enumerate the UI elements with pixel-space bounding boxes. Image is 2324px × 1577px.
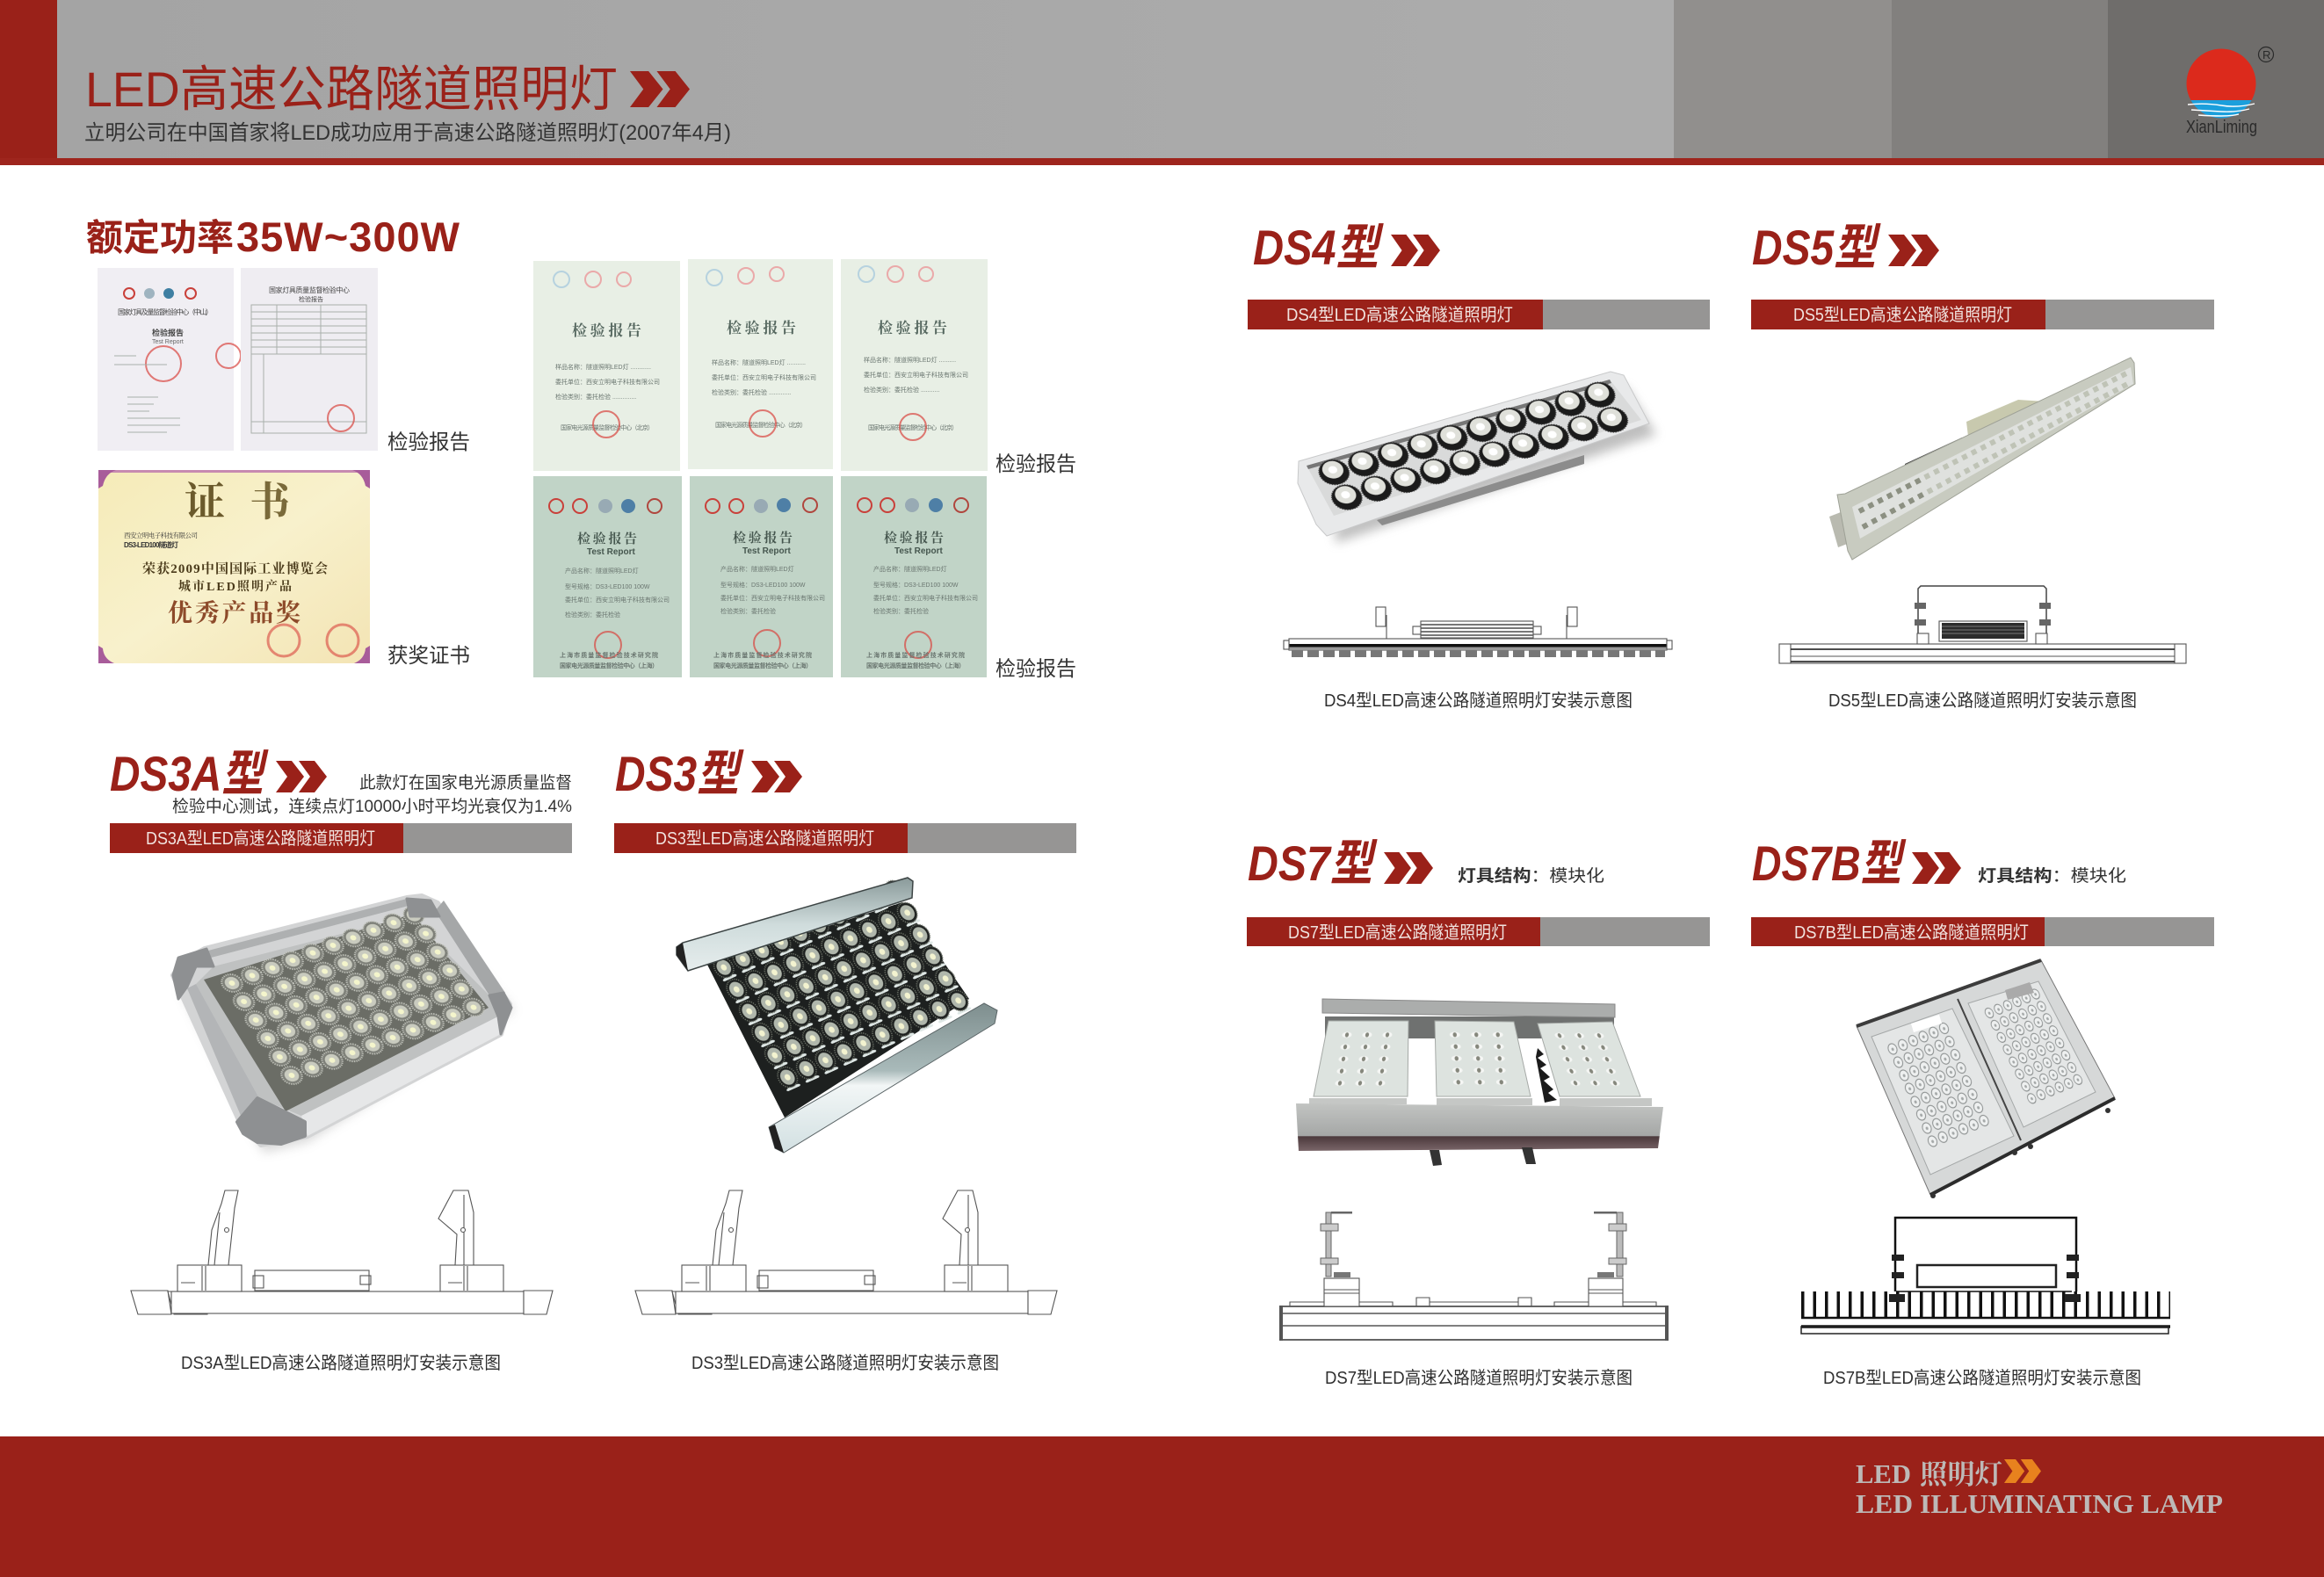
DS3 caption: DS3型LED高速公路隧道照明灯安装示意图 <box>691 1353 999 1373</box>
certificate: 城市LED照明产品 <box>178 580 292 594</box>
icon: DS3 chevrons <box>751 761 802 792</box>
green report A3 <box>841 259 988 471</box>
report document 1: Test Report <box>152 339 184 345</box>
DS7 label bar <box>1247 917 1710 946</box>
label: inspection report: 检验报告 <box>995 657 1076 680</box>
green report B1: Test Report <box>587 547 635 557</box>
DS5 label bar: DS5型LED高速公路隧道照明灯 <box>1793 305 2012 325</box>
green report A2: 国家电光源质量监督检验中心（北京） <box>715 421 807 429</box>
DS7B heading: DS7B型 <box>1752 836 1907 891</box>
report document 2 <box>241 268 378 451</box>
DS7 mounting drawing <box>1279 1212 1669 1341</box>
panel: DS3 <box>614 746 1076 1373</box>
panel: DS4 <box>1248 220 1710 711</box>
certificate: DS3-LED100隧道灯 <box>124 540 178 549</box>
footer text: LED ILLUMINATING LAMP <box>1856 1488 2223 1519</box>
footer text: 照明灯 <box>1920 1459 2002 1490</box>
subtitle: 立明公司在中国首家将LED成功应用于高速公路隧道照明灯(2007年4月) <box>84 121 731 145</box>
DS3A note: 检验中心测试，连续点灯10000小时平均光衰仅为1.4% <box>172 797 572 816</box>
panel: DS5 <box>1751 220 2214 711</box>
green report B2: 国家电光源质量监督检验中心（上海） <box>713 662 812 669</box>
DS3 mounting drawing <box>635 1190 1057 1314</box>
certificate: 荣获2009中国国际工业博览会 <box>142 561 328 576</box>
heading: rated power: 35W~300W <box>236 213 460 260</box>
green report B2 <box>690 476 833 677</box>
report document 1 <box>98 268 241 451</box>
panel: DS7B <box>1751 836 2214 1388</box>
DS4 lamp photo <box>1298 372 1656 543</box>
DS5 lamp photo <box>1829 358 2135 560</box>
DS4 caption: DS4型LED高速公路隧道照明灯安装示意图 <box>1324 691 1633 711</box>
DS7B lamp photo <box>1857 960 2115 1198</box>
logo: XianLiming <box>2186 47 2274 137</box>
green report B1: 型号规格：DS3-LED100 100W <box>565 582 650 590</box>
icon: DS3A chevrons <box>276 761 327 792</box>
label: award certificate: 获奖证书 <box>387 644 470 667</box>
green report A1: 样品名称：隧道照明LED灯 ............ <box>555 363 651 371</box>
certificate: 证 <box>185 480 225 524</box>
DS3A label bar <box>110 823 572 853</box>
green report B1: 产品名称：隧道照明LED灯 <box>565 567 639 575</box>
DS7 lamp photo <box>1296 999 1663 1166</box>
header band <box>0 0 2324 165</box>
DS7 caption: DS7型LED高速公路隧道照明灯安装示意图 <box>1325 1368 1633 1388</box>
DS7B label bar <box>1751 917 2214 946</box>
DS7B mounting drawing <box>1801 1218 2170 1334</box>
DS3 label bar <box>614 823 1076 853</box>
green report B1: 国家电光源质量监督检验中心（上海） <box>560 662 658 669</box>
green report B3 <box>841 476 987 677</box>
green report A2: 委托单位：西安立明电子科技有限公司 <box>712 373 816 381</box>
green report B1: 检 验 报 告 <box>577 531 637 546</box>
green report A1: 检 验 报 告 <box>572 322 641 339</box>
icon: footer chevrons <box>2004 1459 2041 1483</box>
icon: DS4 chevrons <box>1391 235 1440 266</box>
green report B2: 上海市质量监督检验技术研究院 <box>713 651 812 659</box>
certificate: 西安立明电子科技有限公司 <box>124 531 198 539</box>
green report A3: 委托单位：西安立明电子科技有限公司 <box>864 371 968 379</box>
DS7B caption: DS7B型LED高速公路隧道照明灯安装示意图 <box>1823 1368 2141 1388</box>
DS7 label bar: DS7型LED高速公路隧道照明灯 <box>1288 922 1507 943</box>
heading: rated power <box>86 213 460 260</box>
green report B2: 产品名称：隧道照明LED灯 <box>720 565 794 573</box>
DS7B label bar: DS7B型LED高速公路隧道照明灯 <box>1794 922 2029 943</box>
DS7 structure note: 灯具结构 ：模块化 <box>1458 866 1604 886</box>
green report B3: 型号规格：DS3-LED100 100W <box>873 581 959 589</box>
green report B3: 检验类别：委托检验 <box>873 607 929 615</box>
icon: DS7 chevrons <box>1384 852 1433 884</box>
green report B2: 检验类别：委托检验 <box>720 607 776 615</box>
logo: XianLiming: R <box>2262 48 2270 61</box>
green report B3: 检 验 报 告 <box>884 530 944 546</box>
title: LED高速公路隧道照明灯 <box>85 61 618 117</box>
report document 2: 检验报告 <box>299 295 323 303</box>
DS3A heading: DS3A型 <box>110 746 269 801</box>
DS3A caption: DS3A型LED高速公路隧道照明灯安装示意图 <box>181 1353 501 1373</box>
green report B2: 检 验 报 告 <box>733 530 793 546</box>
DS3A lamp photo <box>173 896 514 1153</box>
panel: DS7 <box>1247 836 1710 1388</box>
report document 2: 国家灯具质量监督检验中心 <box>269 286 350 294</box>
label: inspection report: 检验报告 <box>995 452 1076 475</box>
panel: DS3A <box>110 746 572 1373</box>
green report B2: Test Report <box>742 546 791 556</box>
footer text: LED <box>1856 1458 1911 1489</box>
DS5 label bar <box>1751 300 2214 329</box>
logo: XianLiming: XianLiming <box>2186 118 2257 137</box>
DS4 mounting drawing <box>1284 607 1672 654</box>
green report B3: 产品名称：隧道照明LED灯 <box>873 565 947 573</box>
DS5 caption: DS5型LED高速公路隧道照明灯安装示意图 <box>1828 691 2137 711</box>
DS3 lamp photo <box>677 876 997 1153</box>
DS4 label bar: DS4型LED高速公路隧道照明灯 <box>1286 305 1513 325</box>
certificate <box>98 470 370 663</box>
green report A2: 检 验 报 告 <box>727 319 796 336</box>
DS4 label bar <box>1248 300 1710 329</box>
green report A1: 国家电光源质量监督检验中心（北京） <box>561 423 654 431</box>
green report A1: 委托单位：西安立明电子科技有限公司 <box>555 378 660 386</box>
certificate: 书 <box>250 480 291 524</box>
green report A3: 样品名称：隧道照明LED灯 .......... <box>864 356 956 364</box>
label: inspection report: 检验报告 <box>387 430 470 453</box>
DS7 heading: DS7型 <box>1248 836 1378 891</box>
green report B2: 型号规格：DS3-LED100 100W <box>720 581 806 589</box>
DS3A note: 此款灯在国家电光源质量监督 <box>359 773 572 792</box>
green report A1: 检验类别：委托检验 .............. <box>555 393 636 401</box>
green report B1: 委托单位：西安立明电子科技有限公司 <box>565 596 670 604</box>
DS7B structure note: 灯具结构 ：模块化 <box>1978 866 2126 886</box>
green report B3: Test Report <box>894 546 943 556</box>
green report A3: 检验类别：委托检验 ........... <box>864 386 939 394</box>
green report A3: 国家电光源质量监督检验中心（北京） <box>868 423 958 431</box>
green report A2: 样品名称：隧道照明LED灯 ........... <box>712 358 806 366</box>
footer band <box>0 1436 2324 1577</box>
DS4 heading: DS4型 <box>1253 220 1384 275</box>
green report A2: 检验类别：委托检验 ............. <box>712 388 791 396</box>
DS3A label bar: DS3A型LED高速公路隧道照明灯 <box>146 828 375 849</box>
green report B2: 委托单位：西安立明电子科技有限公司 <box>720 594 825 602</box>
green report A1 <box>533 261 680 471</box>
green report B1 <box>533 476 682 677</box>
report document 1: 检验报告 <box>152 328 184 337</box>
certificate: 优秀产品奖 <box>168 599 300 627</box>
green report A3: 检 验 报 告 <box>878 319 947 336</box>
green report B1: 检验类别：委托检验 <box>565 611 620 619</box>
heading: rated power: 额定功率 <box>86 217 234 258</box>
icon: DS7B chevrons <box>1912 852 1961 884</box>
green report B3: 国家电光源质量监督检验中心（上海） <box>866 662 965 669</box>
DS3A mounting drawing <box>131 1190 553 1314</box>
DS3 heading: DS3型 <box>615 746 744 801</box>
DS3 label bar: DS3型LED高速公路隧道照明灯 <box>655 828 874 849</box>
green report B1: 上海市质量监督检验技术研究院 <box>560 651 658 659</box>
green report A2 <box>688 259 833 469</box>
green report B3: 委托单位：西安立明电子科技有限公司 <box>873 594 978 602</box>
DS5 mounting drawing <box>1779 586 2186 663</box>
footer text <box>1856 1458 2223 1519</box>
icon: DS5 chevrons <box>1888 235 1939 266</box>
green report B3: 上海市质量监督检验技术研究院 <box>866 651 965 659</box>
DS5 heading: DS5型 <box>1752 220 1881 275</box>
DS3A note <box>172 773 572 816</box>
icon: title chevrons <box>630 71 690 107</box>
report document 1: 国家灯具及量监督检验中心（中山） <box>118 307 213 316</box>
